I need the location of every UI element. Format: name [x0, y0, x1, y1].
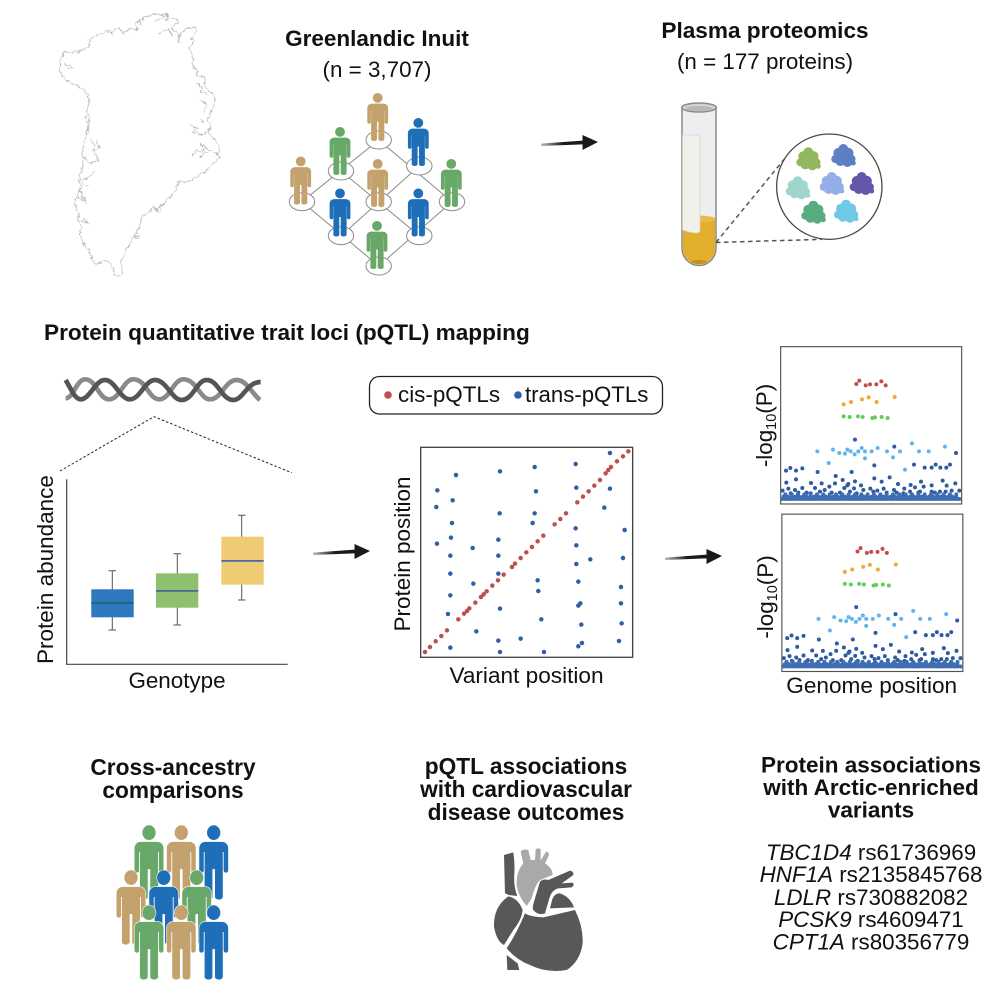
icon: heart	[494, 848, 583, 971]
text: gene and variant list: CPT1A rs80356779	[773, 930, 969, 954]
heading: Arctic-enriched variants: with Arctic-enriched	[762, 775, 979, 800]
heading: Arctic-enriched variants: variants	[828, 798, 914, 822]
axis label: -log10(P) top: (P)	[752, 384, 777, 414]
heading: cardiovascular disease outcomes: disease outcomes	[428, 799, 624, 825]
icon: plasma test tube with protein inset	[682, 103, 882, 266]
axis label: variant position: Variant position	[449, 663, 604, 688]
arrow: scatter to Manhattan plots	[665, 549, 722, 564]
arrow: cohort to proteomics	[541, 135, 598, 150]
heading: cross-ancestry comparisons: Cross-ancestry	[90, 754, 256, 780]
map: Greenland outline	[60, 14, 221, 276]
heading: Plasma proteomics: Plasma proteomics	[661, 18, 869, 43]
axis label: -log10(P) top: 10	[764, 414, 780, 430]
legend: cis and trans pQTLs: cis-pQTLs	[398, 382, 500, 407]
text: sample size: (n = 3,707)	[323, 57, 431, 82]
legend: cis and trans pQTLs	[370, 376, 662, 414]
heading: cardiovascular disease outcomes: pQTL associations	[425, 753, 627, 779]
axis label: genotype: Genotype	[128, 668, 226, 693]
zoom lines from DNA	[60, 417, 292, 473]
heading: pQTL mapping: Protein quantitative trait loci (pQTL) mapping	[44, 320, 530, 345]
heading: cardiovascular disease outcomes: with cardiovascular	[419, 776, 632, 802]
text: protein count: (n = 177 proteins)	[677, 49, 853, 74]
heading: Greenlandic Inuit: Greenlandic Inuit	[285, 26, 469, 51]
icon: DNA helix	[66, 379, 261, 400]
icon: group of people	[116, 825, 228, 980]
legend: cis and trans pQTLs: trans-pQTLs	[525, 382, 648, 407]
axis label: -log10(P) bottom: (P)	[753, 555, 778, 585]
axis label: protein position: Protein position	[390, 476, 415, 632]
cis-pQTL points	[425, 451, 628, 652]
text: gene and variant list: PCSK9 rs4609471	[778, 907, 964, 932]
heading: Arctic-enriched variants: Protein associations	[761, 752, 981, 778]
trans-pQTL points	[436, 453, 625, 652]
box plot: protein abundance by genotype	[67, 479, 288, 664]
axis label: -log10(P) bottom: -log	[753, 601, 778, 639]
box: genotype 3	[221, 537, 264, 585]
network of people	[289, 93, 465, 275]
text: gene and variant list: LDLR rs730882082	[774, 885, 968, 910]
heading: cross-ancestry comparisons: comparisons	[102, 777, 244, 803]
axis label: -log10(P) bottom: 10	[765, 585, 781, 601]
Manhattan plot: top	[781, 347, 962, 504]
box: genotype 1	[91, 589, 134, 617]
scatter plot: variant vs protein position	[421, 447, 633, 657]
text: gene and variant list: HNF1A rs2135845768	[760, 862, 982, 887]
axis label: -log10(P) top: -log	[752, 430, 777, 467]
Manhattan plot: bottom	[782, 514, 963, 671]
arrow: box plot to scatter	[313, 544, 370, 559]
box: genotype 2	[156, 573, 198, 608]
axis label: protein abundance: Protein abundance	[33, 475, 58, 664]
text: gene and variant list: TBC1D4 rs61736969	[766, 840, 976, 865]
axis label: genome position: Genome position	[786, 673, 957, 698]
